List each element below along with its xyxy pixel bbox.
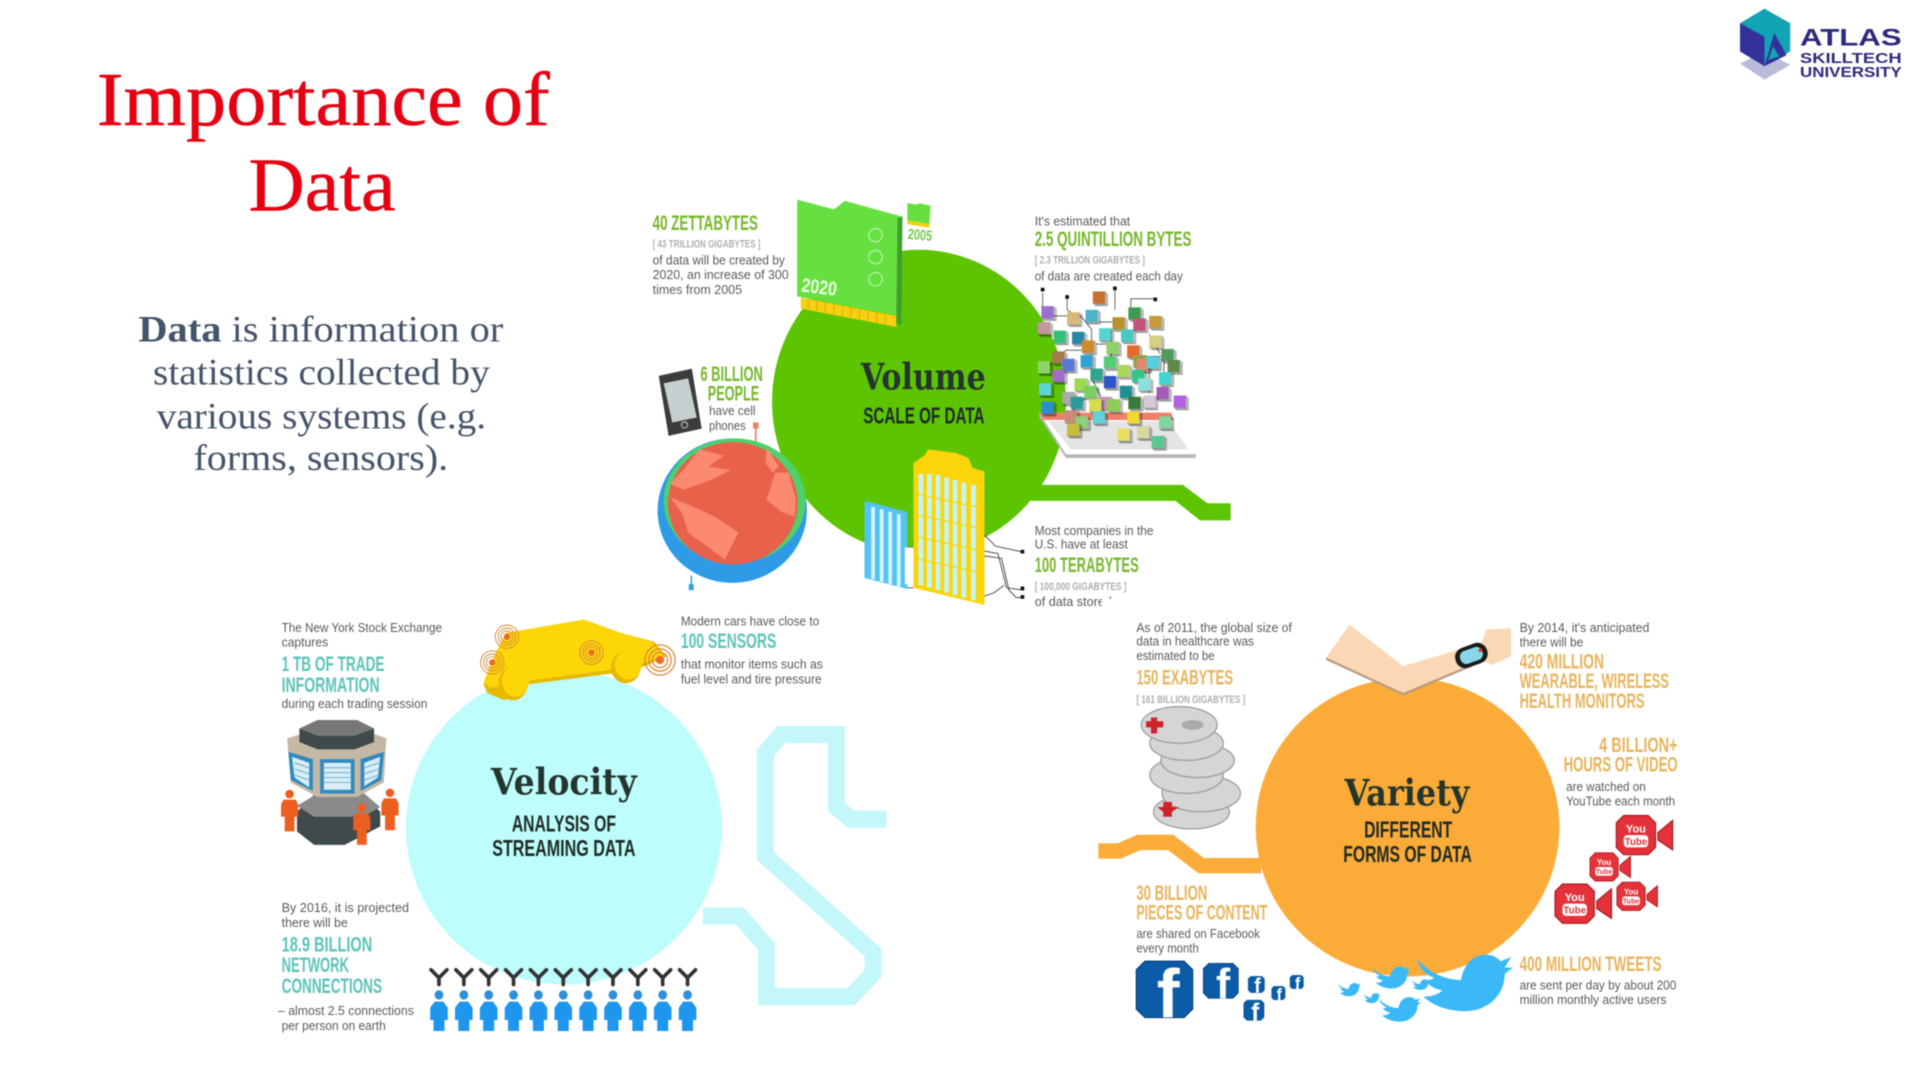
text: 18.9 billion network connections: By 2016, it is projected — [282, 900, 409, 915]
text: 1 TB of trade: The New York Stock Exchange — [282, 620, 442, 635]
text block: data definition: Data is information or — [138, 309, 503, 350]
icon: memory cards: 2020 — [800, 275, 838, 301]
text: 40 zettabytes: 2020, an increase of 300 — [653, 267, 789, 282]
volume circle — [772, 250, 1066, 553]
volume heading: Volume — [860, 355, 986, 398]
text: 100 terabytes — [1035, 523, 1153, 609]
text: 150 exabytes: [ 161 BILLION GIGABYTES ] — [1136, 694, 1246, 706]
text: 420 million health monitors: there will be — [1520, 635, 1583, 650]
text: 18.9 billion network connections: CONNECTIONS — [282, 975, 382, 998]
text: 1 TB of trade — [282, 620, 442, 711]
text: 18.9 billion network connections: per person on earth — [282, 1018, 386, 1033]
text block: data definition: forms, sensors). — [193, 437, 448, 478]
text: 400 million tweets: million monthly active users — [1520, 992, 1667, 1007]
panel: variety — [1098, 620, 1678, 1033]
text: 18.9 billion network connections — [278, 900, 414, 1033]
text: 150 exabytes: 150 EXABYTES — [1136, 666, 1233, 689]
logo: Atlas Skilltech University: ATLAS — [1800, 24, 1902, 51]
panel: velocity — [278, 614, 887, 1033]
text: 2.5 quintillion bytes: [ 2.3 TRILLION GIGABYTES ] — [1035, 254, 1145, 266]
text: 4 billion hours of video: are watched on — [1566, 779, 1646, 794]
icon: globe — [658, 422, 807, 590]
panel: volume — [653, 200, 1231, 609]
text: 100 sensors: 100 SENSORS — [681, 630, 776, 653]
text: 40 zettabytes: times from 2005 — [653, 282, 742, 297]
text: 18.9 billion network connections: 18.9 BILLION — [282, 933, 372, 956]
variety heading: FORMS OF DATA — [1343, 841, 1472, 867]
text: 420 million health monitors — [1520, 620, 1669, 713]
text: 100 terabytes: U.S. have at least — [1035, 537, 1128, 552]
icon: arm with wearable monitor — [1326, 624, 1511, 696]
variety circle — [1256, 678, 1559, 977]
title: Importance of — [97, 58, 551, 142]
text: 2.5 quintillion bytes: It's estimated that — [1035, 213, 1131, 228]
text: 100 terabytes: 100 TERABYTES — [1035, 554, 1139, 577]
variety heading — [1343, 772, 1472, 867]
variety heading: Variety — [1344, 772, 1471, 815]
text: 400 million tweets — [1520, 953, 1676, 1007]
text: 100 sensors: Modern cars have close to — [681, 614, 819, 629]
logo: Atlas Skilltech University: SKILLTECH — [1800, 51, 1902, 67]
text: 30 billion pieces of content: every month — [1136, 941, 1199, 956]
text: 100 sensors — [681, 614, 823, 686]
text: 30 billion pieces of content — [1136, 882, 1268, 956]
variety heading: DIFFERENT — [1364, 817, 1452, 843]
text block: data definition — [138, 309, 503, 478]
icon: memory cards — [797, 200, 933, 327]
text: 420 million health monitors: WEARABLE, WIRELESS — [1520, 670, 1669, 693]
icon: office buildings — [864, 449, 1024, 605]
text: 4 billion hours of video: HOURS OF VIDEO — [1564, 753, 1678, 776]
icon: stack of medical disks — [1141, 707, 1240, 829]
icon: twitter birds — [1338, 955, 1513, 1022]
text: 6 billion people: PEOPLE — [708, 382, 759, 405]
text: 420 million health monitors: HEALTH MONITORS — [1520, 690, 1645, 713]
text: 420 million health monitors: 420 MILLION — [1520, 651, 1604, 674]
text: 1 TB of trade: captures — [282, 635, 328, 650]
text: 420 million health monitors: By 2014, it's anticipated — [1520, 620, 1649, 635]
logo: Atlas Skilltech University — [1740, 9, 1902, 81]
text: 30 billion pieces of content: PIECES OF CONTENT — [1136, 902, 1268, 925]
text: 4 billion hours of video — [1564, 734, 1678, 809]
icon: car with sensors — [481, 620, 675, 700]
text block: data definition: statistics collected by — [153, 351, 490, 392]
icon: stock exchange building — [281, 720, 399, 845]
text: 40 zettabytes — [653, 212, 789, 297]
text block: data definition: various systems (e.g. — [157, 396, 486, 437]
text: 6 billion people: phones — [709, 418, 746, 433]
text: 18.9 billion network connections: there will be — [282, 915, 348, 930]
velocity heading: STREAMING DATA — [492, 835, 636, 861]
text: 150 exabytes: As of 2011, the global size of — [1136, 620, 1292, 635]
icon: phone — [659, 369, 702, 436]
text: 30 billion pieces of content: 30 BILLION — [1136, 882, 1207, 905]
text: 150 exabytes: estimated to be — [1136, 648, 1215, 663]
text: 4 billion hours of video: 4 BILLION+ — [1599, 734, 1678, 757]
text: 40 zettabytes: [ 43 TRILLION GIGABYTES ] — [653, 238, 761, 250]
icon: memory cards: 2005 — [907, 227, 933, 245]
text: 30 billion pieces of content: are shared on Facebook — [1136, 926, 1261, 941]
text: 150 exabytes — [1136, 620, 1292, 706]
icon: antennas and people row — [430, 970, 696, 1031]
volume heading — [860, 355, 986, 429]
icon: data cubes over grid — [1038, 287, 1196, 458]
title: Data — [249, 144, 396, 228]
text: 6 billion people: have cell — [709, 403, 756, 418]
text: 40 zettabytes: 40 ZETTABYTES — [653, 212, 758, 235]
text: 1 TB of trade: during each trading session — [282, 696, 427, 711]
volume connector line — [1022, 485, 1231, 520]
logo: Atlas Skilltech University: UNIVERSITY — [1800, 65, 1902, 81]
text: 18.9 billion network connections: – almost 2.5 connections — [278, 1003, 414, 1018]
variety connector line — [1098, 842, 1261, 866]
text: 100 terabytes: of data stored — [1035, 594, 1112, 609]
text: 2.5 quintillion bytes: 2.5 QUINTILLION BYTES — [1035, 228, 1192, 251]
velocity heading: Velocity — [490, 761, 638, 804]
velocity circle — [406, 671, 722, 984]
velocity heading: ANALYSIS OF — [512, 810, 616, 836]
text: 100 sensors: fuel level and tire pressure — [681, 671, 822, 686]
title — [97, 58, 551, 228]
velocity connector line — [703, 735, 887, 997]
text: 18.9 billion network connections: NETWORK — [282, 954, 349, 977]
text: 2.5 quintillion bytes — [1035, 213, 1192, 283]
icon: youtube cameras — [1555, 816, 1673, 923]
text: 100 sensors: that monitor items such as — [681, 657, 823, 672]
text: 40 zettabytes: of data will be created by — [653, 252, 785, 267]
text: 6 billion people: 6 BILLION — [700, 363, 763, 386]
text: 1 TB of trade: 1 TB OF TRADE — [282, 653, 385, 676]
text: 4 billion hours of video: YouTube each month — [1566, 794, 1675, 809]
text: 150 exabytes: data in healthcare was — [1136, 633, 1254, 648]
text: 400 million tweets: 400 MILLION TWEETS — [1520, 953, 1662, 976]
text: 2.5 quintillion bytes: of data are created each day — [1035, 268, 1183, 283]
text: 400 million tweets: are sent per day by about 200 — [1520, 977, 1676, 992]
text: 6 billion people — [700, 363, 763, 433]
text: 1 TB of trade: INFORMATION — [282, 674, 380, 697]
text: 100 terabytes: Most companies in the — [1035, 523, 1153, 538]
icon: facebook logos — [1136, 956, 1303, 1033]
velocity heading — [490, 761, 638, 861]
text: 100 terabytes: [ 100,000 GIGABYTES ] — [1035, 581, 1127, 593]
volume heading: SCALE OF DATA — [863, 403, 985, 429]
